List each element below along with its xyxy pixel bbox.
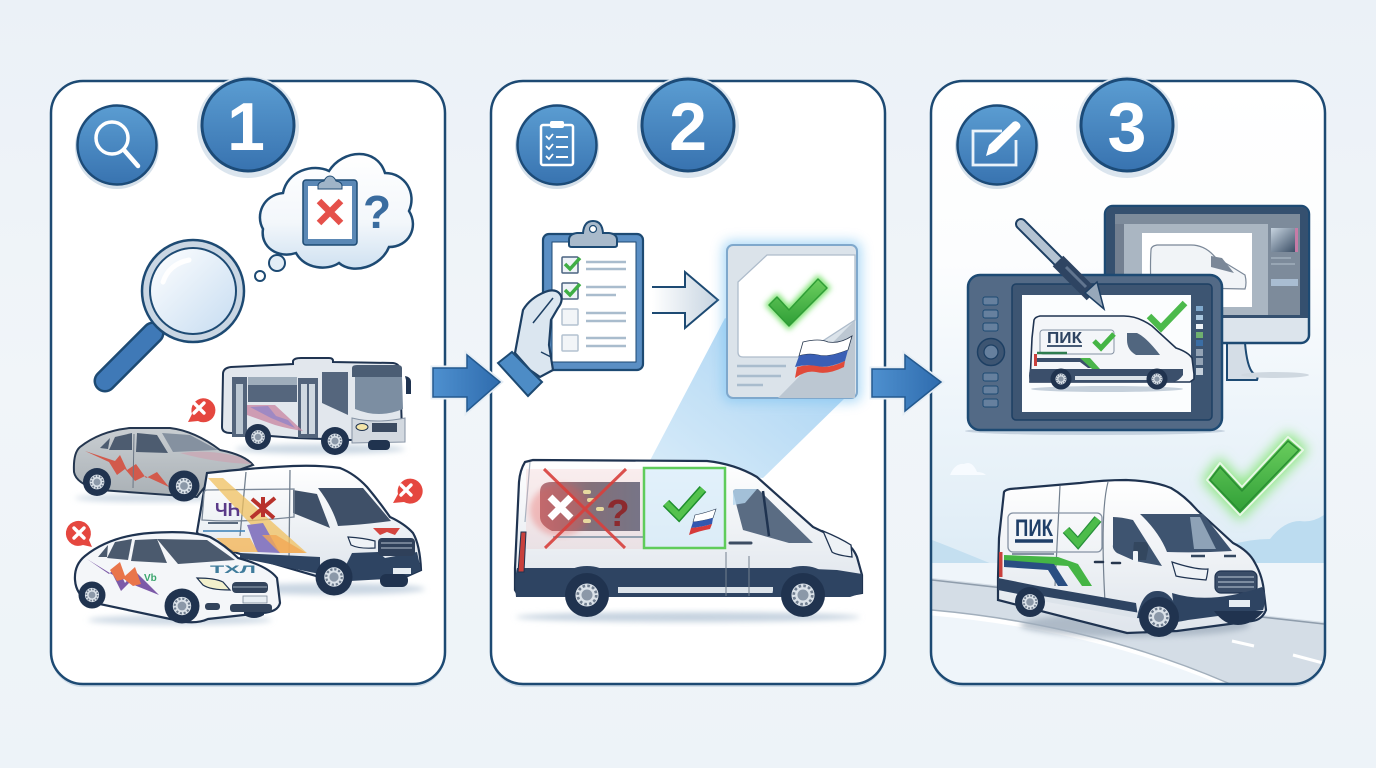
icon: search badge [75,105,159,189]
step number 3: 3 [1108,88,1146,166]
drawing tablet [965,275,1225,435]
panel 2: check the requirements [491,76,885,687]
desktop monitor with design software [1105,206,1309,380]
infographic canvas [50,76,1326,687]
bus [222,358,411,455]
grey sedan [74,428,253,502]
step number 3 [1076,76,1178,178]
error marker: bus/sedan [188,398,215,422]
callout: requirement document [723,241,861,402]
van with old wrap and approved zone: ? [606,493,630,535]
van with old wrap and approved zone [515,460,862,622]
arrow: checklist to callout [652,272,718,328]
icon: checklist badge [515,105,599,189]
wrapped van with mismatched graphics: ЧҺ [215,500,240,520]
finished van on the road [998,480,1266,637]
thought cloud with clipboard: ? [363,186,391,238]
stylus pen [1021,224,1104,309]
white sedan with mismatched graphics: ТХЛ [210,564,256,576]
step number 1: 1 [227,89,265,165]
approved zone on van [644,468,725,548]
landscape and road [932,463,1324,690]
error marker: sedan [66,521,92,547]
error marker: van [393,479,423,504]
step number 2 [637,76,739,178]
panel 3: design the new livery [931,76,1325,690]
finished van on the road: ПИК [1015,515,1053,542]
wrapped van with mismatched graphics [197,466,425,596]
green check on tablet [1149,303,1185,328]
arrow: step 2 to step 3 [872,355,941,411]
van on tablet screen [1029,316,1194,392]
step number 1 [197,76,299,178]
magnifying glass [105,240,244,381]
thought cloud with clipboard [255,154,413,281]
beam from van zone to callout [645,318,848,478]
white sedan with mismatched graphics [75,532,280,625]
arrow: step 1 to step 2 [433,355,500,411]
clipboard checklist in hand [498,221,643,396]
van on tablet screen: ПИК [1047,330,1082,347]
large green approval check [1207,437,1303,515]
panel 1: find the problem [51,76,445,687]
step number 2: 2 [669,89,707,165]
icon: edit badge [955,105,1039,189]
white sedan with mismatched graphics: Vb [144,573,157,584]
